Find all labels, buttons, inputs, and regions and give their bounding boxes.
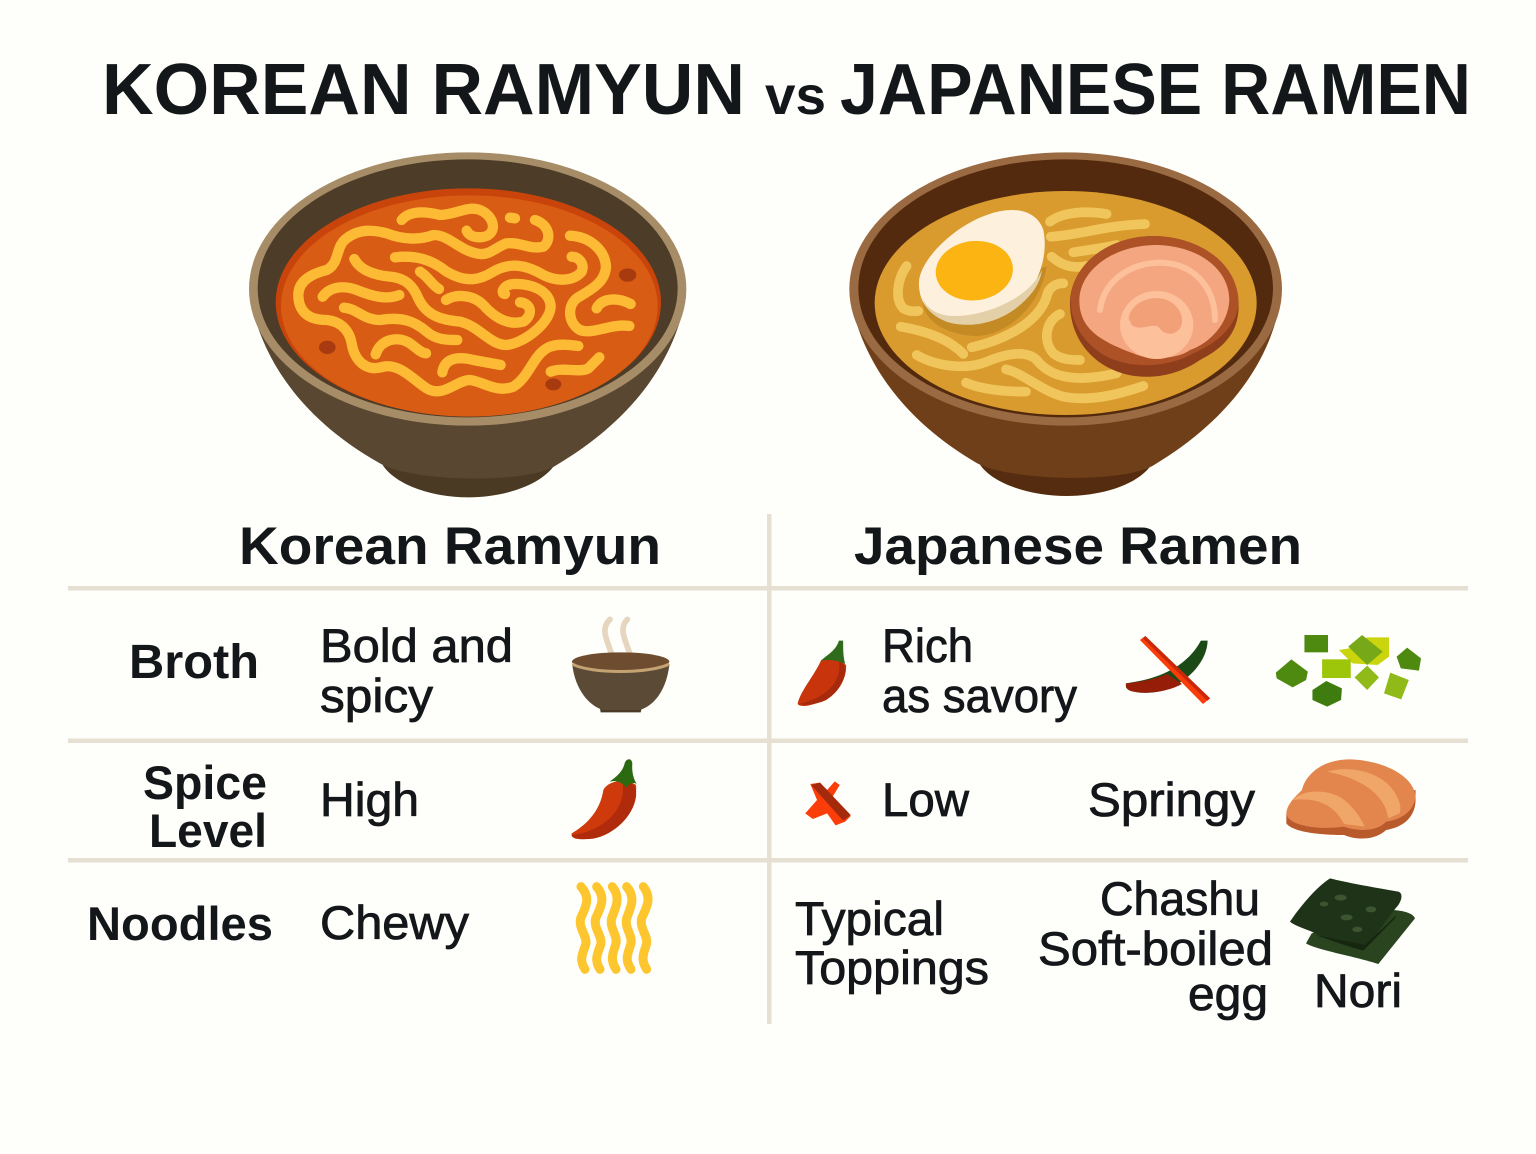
row label: Broth: Broth [129, 636, 259, 689]
Korean broth text: Bold and [320, 619, 513, 672]
Japanese broth text [882, 619, 1077, 722]
noodles in savory broth [898, 212, 1145, 398]
icon: pork slice [1286, 759, 1416, 839]
chashu pork slice [1070, 236, 1239, 377]
column heading: Korean Ramyun: Korean Ramyun [239, 517, 661, 576]
soft-boiled egg [919, 210, 1047, 336]
row label: Typical Toppings: Typical [795, 892, 944, 945]
icon: red cross [805, 781, 851, 825]
icon: crossed-out chili [1126, 636, 1210, 704]
title [102, 50, 1471, 130]
row label: Typical Toppings [795, 892, 989, 994]
row label: Typical Toppings: Toppings [795, 941, 989, 994]
icon: mild red chili [798, 641, 846, 706]
toppings text: Chashu, soft-boiled egg: Soft-boiled [1038, 922, 1273, 975]
Japanese spice level text: Low [882, 773, 970, 826]
Japanese noodle text: Springy [1088, 773, 1256, 826]
Korean broth text: spicy [320, 669, 434, 722]
icon: chopped scallions [1276, 635, 1421, 707]
row label: Spice Level [143, 756, 267, 857]
topping text: Nori: Nori [1314, 964, 1402, 1017]
row label: Spice Level: Spice [143, 756, 267, 809]
title: JAPANESE RAMEN [840, 50, 1471, 130]
Japanese broth text: Rich [882, 619, 973, 672]
title: KOREAN RAMYUN [102, 50, 745, 130]
Korean spice level text: High [320, 773, 419, 826]
row label: Spice Level: Level [149, 804, 267, 857]
icon: steaming soup bowl [572, 619, 669, 712]
Korean noodle text: Chewy [320, 896, 470, 949]
toppings text: Chashu, soft-boiled egg: Chashu [1100, 872, 1260, 925]
illustration: Japanese ramen bowl [849, 152, 1282, 496]
toppings text: Chashu, soft-boiled egg [1038, 872, 1273, 1020]
icon: nori sheets [1290, 878, 1415, 964]
Japanese broth text: as savory [882, 669, 1077, 722]
toppings text: Chashu, soft-boiled egg: egg [1188, 967, 1268, 1020]
noodles in spicy broth [298, 209, 631, 391]
illustration: Korean ramyun bowl [249, 152, 686, 497]
icon: hot red chili [572, 759, 637, 839]
title: vs [765, 66, 826, 126]
row label: Noodles: Noodles [87, 897, 273, 950]
Korean broth text [320, 619, 513, 722]
icon: wavy noodles [580, 887, 648, 969]
column heading: Japanese Ramen: Japanese Ramen [854, 517, 1302, 576]
